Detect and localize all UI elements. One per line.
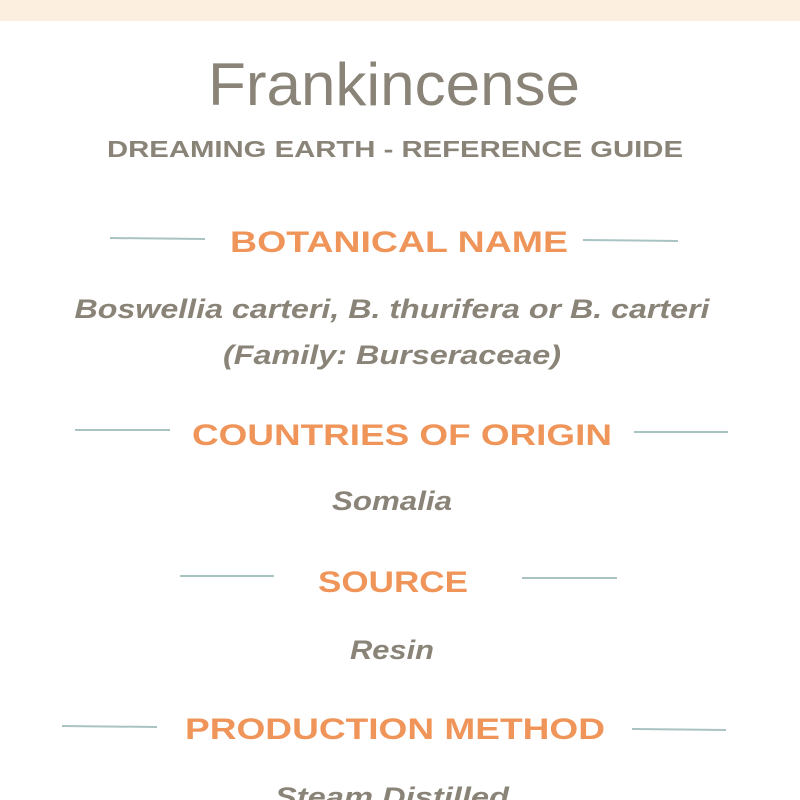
section: countries of origin	[75, 419, 728, 516]
text: resin: Resin	[350, 635, 434, 665]
subtitle: DREAMING EARTH - REFERENCE GUIDE	[107, 136, 683, 162]
heading: production method: PRODUCTION METHOD	[185, 713, 605, 746]
text: botanical name: Boswellia carteri, B. thurifera or B. carteri	[74, 294, 710, 324]
section: botanical name: (Family: Burseraceae)	[223, 340, 561, 370]
section: botanical name	[74, 226, 710, 370]
heading: countries of origin: COUNTRIES OF ORIGIN	[192, 419, 612, 452]
heading: source: SOURCE	[318, 566, 468, 599]
title: Frankincense	[208, 51, 580, 118]
text: somalia: Somalia	[332, 486, 452, 516]
section: source	[180, 566, 617, 665]
top band	[0, 0, 800, 21]
section: production method	[62, 713, 726, 800]
heading: botanical name: BOTANICAL NAME	[230, 226, 568, 259]
